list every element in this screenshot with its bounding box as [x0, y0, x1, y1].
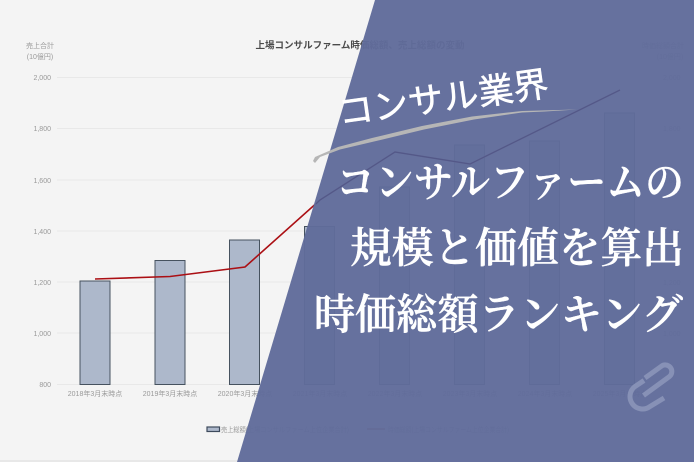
right axis labels: 1,600 — [663, 178, 681, 185]
headline line 3: 時価総額ランキング — [314, 292, 683, 339]
left axis labels: 1,800 — [33, 126, 51, 133]
legend — [207, 425, 509, 434]
ghost line showing through the overlay — [316, 90, 620, 204]
left axis title: 売上合計 — [26, 41, 54, 50]
diagonal blue overlay panel — [237, 0, 694, 462]
brush stroke underline — [313, 110, 577, 163]
right axis title: 時価総額合計 — [642, 41, 684, 50]
right axis labels: 1,800 — [663, 126, 681, 133]
left axis labels: 800 — [39, 382, 51, 389]
x axis labels: 2018年3月末時点 — [68, 389, 122, 398]
left axis labels: 1,600 — [33, 178, 51, 185]
right axis labels: 1,200 — [663, 280, 681, 287]
x axis labels: 2020年3月末時点 — [218, 389, 272, 398]
icon: paperclip — [630, 365, 672, 409]
right axis title: (10億円) — [657, 52, 683, 61]
right axis labels: 1,400 — [663, 229, 681, 236]
x axis labels: 2022年3月末時点 — [368, 389, 422, 398]
legend: 時価総額(上場コンサルファーム上位企業合計) — [388, 425, 509, 434]
headline — [314, 161, 684, 339]
right axis title — [642, 41, 684, 61]
headline line 2: 規模と価値を算出 — [350, 226, 684, 272]
x axis labels: 2019年3月末時点 — [143, 389, 197, 398]
right axis labels: 1,000 — [663, 331, 681, 338]
legend: 売上総額(上場コンサルファーム上位企業合計) — [221, 425, 349, 434]
x axis labels: 2023年3月末時点 — [443, 389, 497, 398]
x axis labels: 2021年3月末時点 — [293, 389, 347, 398]
bars: sales total — [80, 113, 634, 384]
x axis labels: 2024年3月末時点 — [518, 389, 572, 398]
x axis labels: 2025年3月末時点 — [593, 389, 647, 398]
left axis title — [26, 41, 54, 61]
left axis labels: 1,200 — [33, 280, 51, 287]
left axis title: (10億円) — [27, 52, 53, 61]
x axis labels — [68, 389, 647, 398]
left axis labels — [33, 75, 51, 389]
chart title: 上場コンサルファーム時価総額、売上総額の変動 — [256, 40, 464, 52]
right axis labels — [663, 75, 681, 338]
left axis labels: 2,000 — [33, 75, 51, 82]
left axis labels: 1,400 — [33, 229, 51, 236]
category label: consulting industry: コンサル業界 — [336, 65, 551, 133]
line: market cap total — [95, 90, 620, 279]
right axis labels: 2,000 — [663, 75, 681, 82]
left axis labels: 1,000 — [33, 331, 51, 338]
